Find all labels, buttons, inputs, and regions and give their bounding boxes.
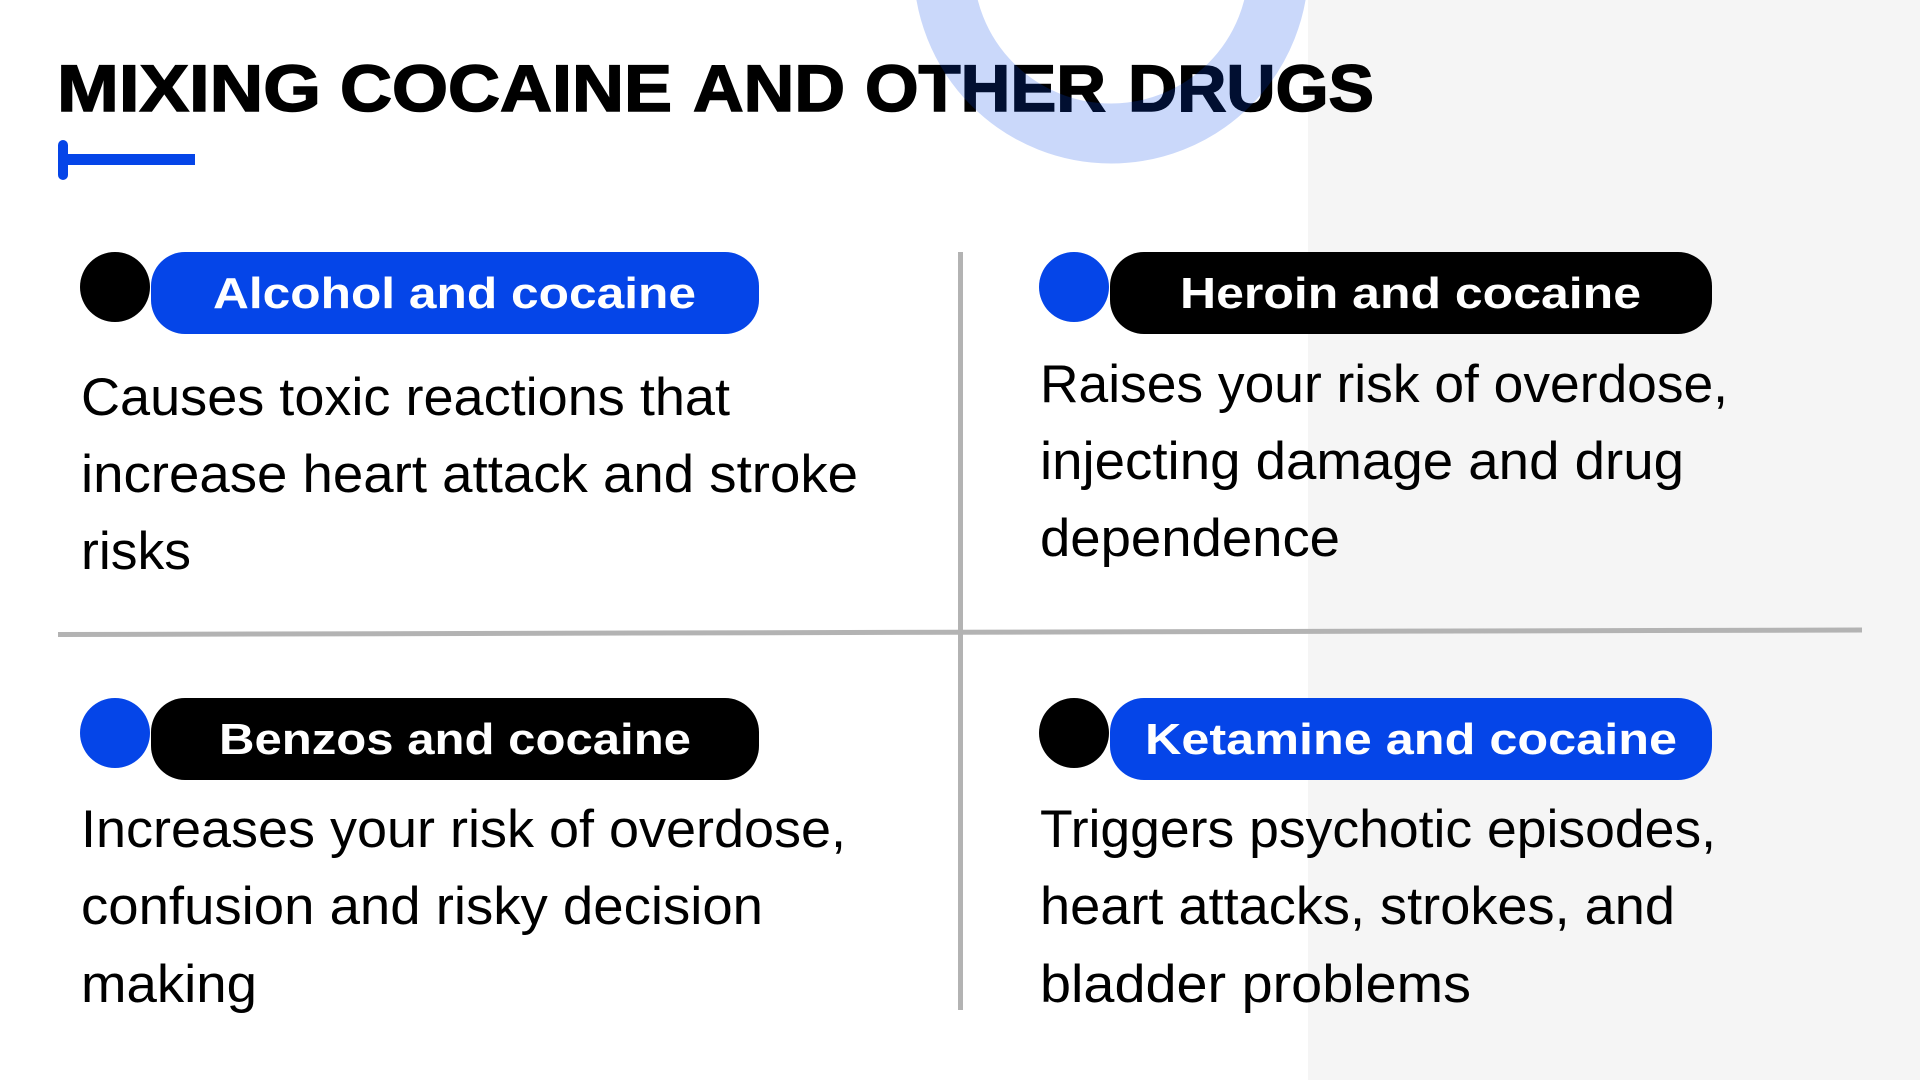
description: making — [81, 955, 257, 1014]
decorative ring — [944, 0, 1278, 134]
bullet circle — [80, 252, 150, 322]
bullet circle — [80, 698, 150, 768]
description: increase heart attack and stroke — [81, 445, 858, 504]
title: MIXING — [57, 51, 321, 125]
title: COCAINE — [340, 51, 672, 125]
description: Triggers psychotic episodes, — [1040, 800, 1716, 859]
description — [1040, 355, 1728, 568]
heading pill — [151, 252, 759, 334]
description: Increases your risk of overdose, — [81, 800, 846, 859]
bullet circle — [1039, 698, 1109, 768]
heading pill — [1110, 698, 1712, 780]
panel: alcohol and cocaine — [80, 252, 858, 581]
title: AND — [693, 51, 845, 125]
description: Raises your risk of overdose, — [1040, 355, 1728, 414]
description: risks — [81, 522, 191, 581]
vertical divider — [958, 252, 963, 1010]
description — [81, 800, 846, 1014]
heading pill — [151, 698, 759, 780]
heading pill: Heroin and cocaine — [1180, 269, 1641, 318]
horizontal divider — [58, 630, 1862, 634]
panel: heroin and cocaine — [1039, 252, 1728, 568]
heading pill — [1110, 252, 1712, 334]
title underline accent — [58, 140, 195, 180]
description: bladder problems — [1040, 955, 1471, 1014]
heading pill: Alcohol and cocaine — [213, 269, 696, 318]
bullet circle — [1039, 252, 1109, 322]
description: injecting damage and drug — [1040, 432, 1684, 491]
title: OTHER — [865, 51, 1106, 125]
description: confusion and risky decision — [81, 877, 763, 936]
heading pill: Ketamine and cocaine — [1145, 715, 1677, 764]
description — [1040, 800, 1716, 1014]
description: Causes toxic reactions that — [81, 368, 730, 427]
description — [81, 368, 858, 581]
description: dependence — [1040, 509, 1340, 568]
heading pill: Benzos and cocaine — [219, 715, 691, 764]
title: DRUGS — [1128, 51, 1374, 125]
panel: benzos and cocaine — [80, 698, 846, 1014]
panel: ketamine and cocaine — [1039, 698, 1716, 1014]
description: heart attacks, strokes, and — [1040, 877, 1675, 936]
title — [57, 51, 1374, 125]
